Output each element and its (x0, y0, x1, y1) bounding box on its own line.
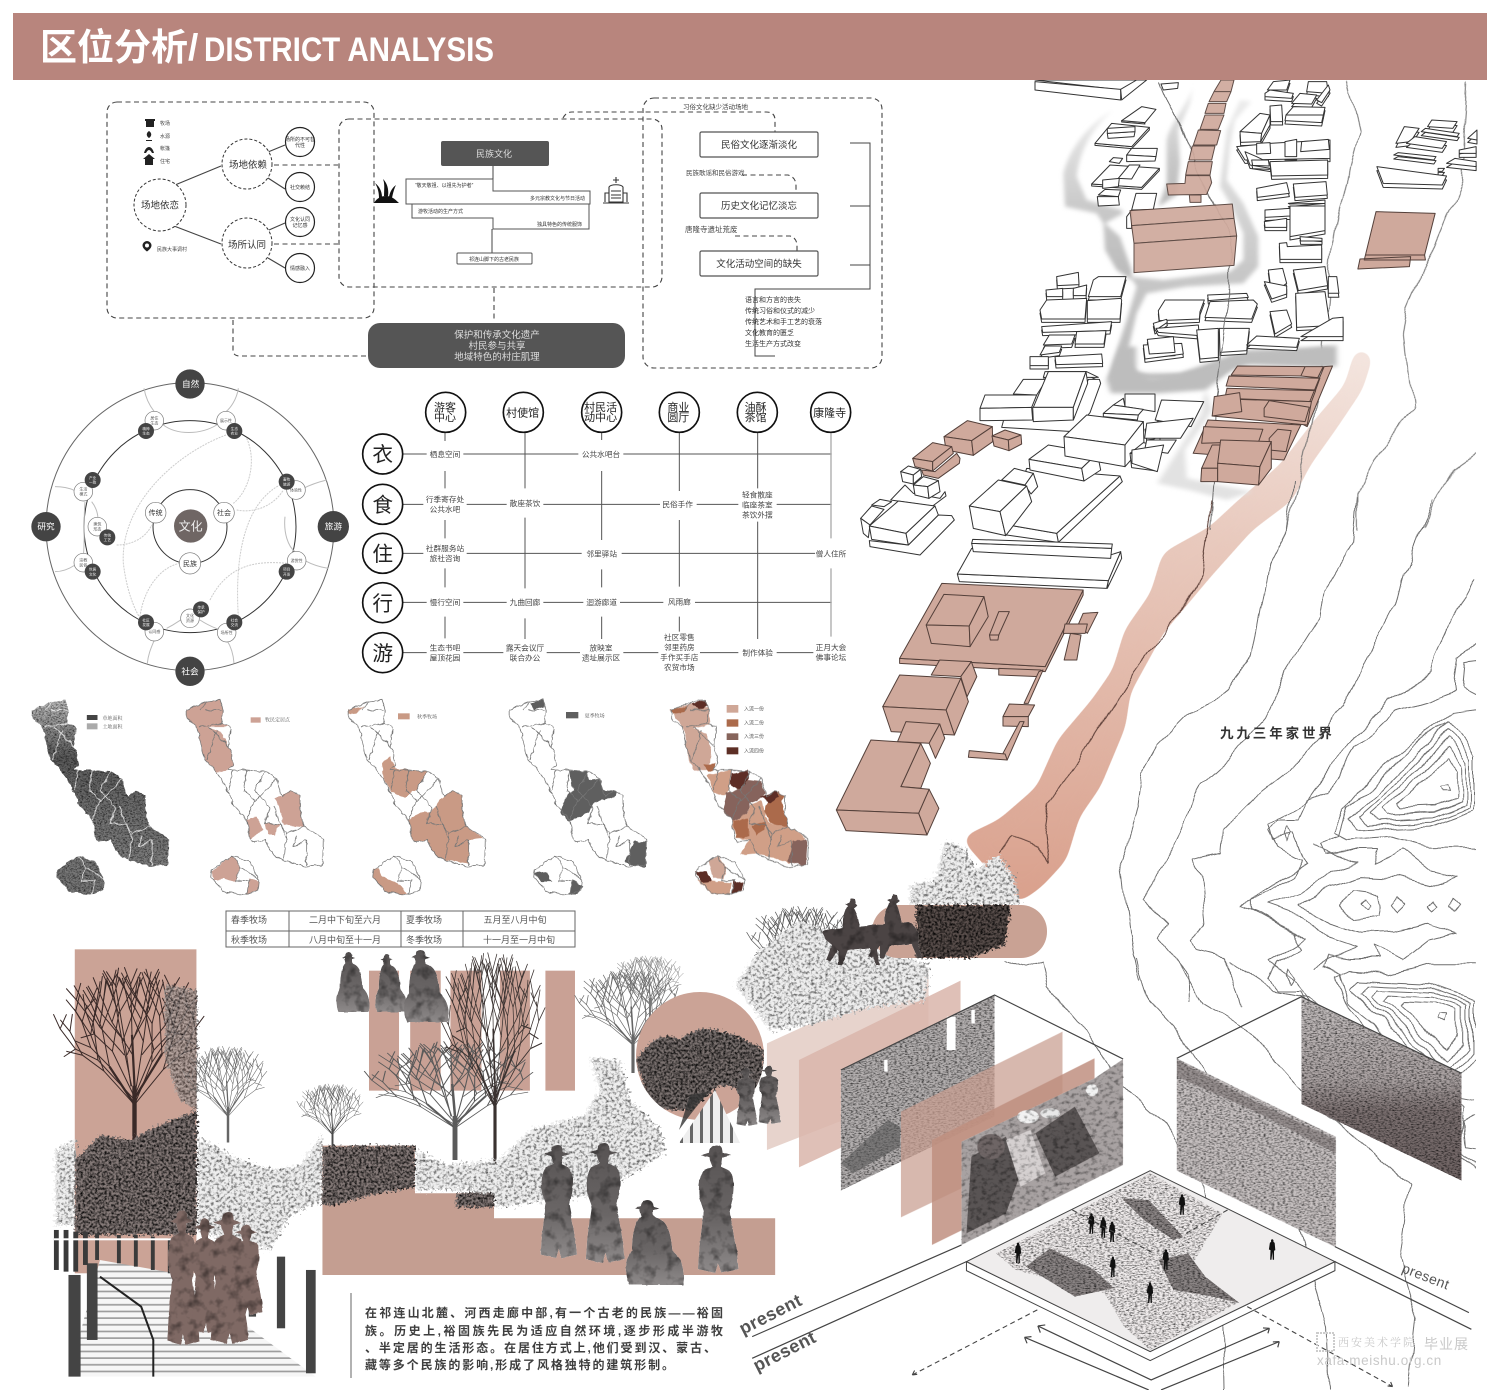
chart: culture orbit diagram: 模式 (79, 490, 87, 496)
panel: place attachment diagram: 场地依恋 (141, 200, 179, 212)
chart: programme matrix: 住 (372, 543, 393, 566)
chart: culture orbit diagram: 发展 (142, 622, 150, 627)
small figures (1015, 1194, 1275, 1303)
chart: culture orbit diagram: 产业 (89, 475, 97, 480)
chart: programme matrix: 屋顶花园 (430, 652, 461, 662)
pink plane B (799, 981, 961, 1167)
chart: programme matrix: 栖息空间 (430, 449, 460, 459)
chart: culture orbit diagram: 场所性 (221, 629, 233, 635)
panel: problems: 历史文化记忆淡忘 (721, 200, 797, 212)
map 1: land texture (32, 699, 169, 894)
callout: conclusion box: 地域特色的村庄肌理 (454, 351, 540, 363)
map 5: composite pasture layers (671, 699, 808, 894)
chart: culture orbit diagram: 农业 (231, 431, 238, 436)
watermark: xafa.meishu.org.cn (1317, 1353, 1442, 1368)
chart: culture orbit diagram: 生态 (142, 431, 150, 436)
town massing: upper white buildings (1030, 80, 1330, 381)
panel: problems: 唐隆寺遗址荒废 (685, 224, 738, 234)
dark box: ethnic culture: 民族文化 (476, 148, 512, 159)
chart: culture orbit diagram: 传统 (149, 508, 163, 517)
table: pasture seasons: 冬季牧场 (406, 934, 442, 945)
chart: programme matrix: 手作买手店 (660, 652, 699, 662)
chart: programme matrix: 公共水吧 (430, 504, 461, 514)
chart: culture orbit diagram: 文化 (89, 571, 97, 576)
chart: programme matrix: 邻里驿站 (586, 549, 617, 559)
foliage: dark shrubs (75, 985, 494, 1235)
chart: culture orbit diagram: 展示性 (220, 417, 232, 423)
panel: ethnic culture flow: “敬天敬祖、以祖先为护者” (415, 182, 474, 189)
chart: culture orbit diagram: 生态 (231, 426, 238, 431)
chart: programme matrix: 游客 (434, 400, 456, 414)
panel: ethnic culture flow (339, 112, 775, 320)
label: nine-three family world: 九九三年家世界 (1220, 725, 1335, 741)
chart: programme matrix: 风雨廊 (668, 596, 691, 606)
header band (13, 13, 1487, 80)
chart: programme matrix: 制作体验 (742, 647, 773, 657)
panel: problems: 语言和方言的丧失 (745, 295, 801, 304)
photo: mountain sky (1301, 997, 1462, 1181)
panel: ethnic culture flow: 多元宗教文化与节日活动 (530, 195, 585, 202)
chart: culture orbit diagram: 旅游 (283, 481, 291, 486)
chart: programme matrix: 正月大会 (816, 642, 847, 652)
panel: place attachment diagram: 代性 (295, 142, 305, 149)
paragraph: site introduction: 藏等多个民族的影响,形成了风格独特的建筑形制。 (365, 1357, 674, 1372)
chart: culture orbit diagram: 社会 (181, 665, 199, 676)
chart: culture orbit diagram: 传统 (104, 532, 111, 537)
chart: programme matrix: 动中心 (584, 411, 617, 424)
chart: culture orbit diagram: 资源 (186, 617, 194, 623)
chart: culture orbit diagram: 文化 (186, 612, 194, 618)
callout: conclusion box: 保护和传承文化遗产 (454, 329, 540, 341)
pink plane A (767, 969, 929, 1150)
panel: problems (643, 98, 882, 368)
chart: culture orbit diagram: 开发 (283, 571, 291, 576)
chart: programme matrix: 露天会议厅 (506, 642, 544, 652)
panel: ethnic culture flow: 独具特色的传统服饰 (537, 221, 582, 228)
dark box: ethnic culture (441, 141, 549, 166)
watermark: 西安美术学院 (1338, 1335, 1416, 1349)
table: pasture seasons: 八月中旬至十一月 (309, 934, 381, 945)
panel: iso photo planes (752, 969, 1471, 1390)
chart: programme matrix: 食 (372, 494, 393, 517)
chart: programme matrix (363, 392, 851, 673)
map 2: settlement points (187, 699, 323, 894)
chart: programme matrix: 迴游廊道 (586, 597, 617, 607)
chart: culture orbit diagram: 民族 (183, 559, 197, 568)
chart: programme matrix: 慢行空间 (430, 597, 460, 607)
panel: place attachment diagram: 文化认同 (290, 216, 310, 223)
chart: culture orbit diagram: 社会 (217, 508, 231, 517)
chart: programme matrix: 民俗手作 (662, 499, 693, 509)
chart: culture orbit diagram: 精神 (142, 426, 150, 431)
panel: place attachment diagram: 场所的不可替 (285, 136, 315, 143)
buildings: west of temple (1092, 83, 1178, 228)
panel: pasture collage background (75, 949, 775, 1275)
table: pasture seasons: 夏季牧场 (406, 914, 442, 925)
chart: culture orbit diagram: 居住 (150, 414, 158, 420)
photo: grazing animals (1177, 1058, 1336, 1247)
town massing: pink heritage buildings (836, 80, 1435, 835)
silhouettes: seated herders (337, 950, 449, 1022)
panel: place attachment diagram: 民族大事调村 (157, 246, 187, 253)
chart: culture orbit diagram: 畜牧 (283, 477, 291, 482)
chart: culture orbit diagram: 传承 (197, 604, 205, 609)
chart: culture orbit diagram: 工艺 (104, 537, 111, 542)
chart: culture orbit diagram: 社会 (231, 617, 238, 622)
table: pasture seasons: 五月至八月中旬 (483, 914, 547, 925)
town massing: lower white buildings (861, 372, 1160, 588)
header band: DISTRICT ANALYSIS (204, 31, 494, 69)
watermark: 毕业展 (1424, 1336, 1469, 1352)
chart: culture orbit diagram: 文化 (179, 518, 203, 533)
map 3: autumn pasture (348, 699, 485, 894)
buildings: east and centre (1030, 83, 1330, 381)
chart: programme matrix: 放映室 (590, 642, 613, 652)
icon: temple (603, 177, 629, 203)
panel: place attachment diagram: 记忆感 (292, 222, 308, 229)
chart: programme matrix: 商业 (667, 400, 689, 414)
chart: programme matrix: 僧人住所 (816, 549, 847, 559)
silhouettes: standing villagers (541, 1143, 738, 1285)
panel: place attachment diagram: 场地依赖 (229, 159, 267, 171)
map 5: composite pasture layers: 入流二份 (744, 719, 764, 726)
paragraph: site introduction: 族。历史上,裕固族先民为适应自然环境,逐步形成半游牧 (365, 1323, 723, 1338)
chart: programme matrix: 联合办公 (510, 652, 541, 662)
chart: programme matrix: 社区零售 (664, 632, 695, 642)
chart: culture orbit diagram: 旅游 (325, 521, 342, 532)
chart: programme matrix: 茶饮外摆 (742, 509, 773, 519)
chart: culture orbit diagram: 保护 (197, 609, 205, 614)
chart: programme matrix: 九曲回廊 (510, 597, 541, 607)
map 5: composite pasture layers: 入流四份 (744, 747, 764, 754)
chart: culture orbit diagram: 认同感 (148, 628, 160, 634)
chart: programme matrix: 衣 (372, 444, 393, 467)
panel: problems: 文化活动空间的缺失 (716, 258, 802, 270)
chart: programme matrix: 轻食散座 (742, 489, 773, 499)
chart: programme matrix: 社群服务站 (426, 543, 464, 553)
chart: programme matrix: 中心 (434, 411, 456, 424)
chart: programme matrix: 村民活 (584, 400, 617, 414)
panel: problems: 民俗文化逐渐淡化 (721, 139, 797, 151)
base map (966, 1171, 1335, 1361)
panel: place attachment diagram (107, 102, 374, 356)
chart: culture orbit diagram: 生活 (79, 485, 87, 491)
map 2: settlement points: 牧民定居点 (265, 717, 291, 724)
chart: programme matrix: 公共水吧台 (582, 449, 620, 459)
chart: culture orbit diagram: 自然 (182, 378, 200, 389)
boardwalk (54, 1230, 316, 1377)
panel: place attachment diagram: 场所认同 (228, 239, 266, 251)
circle vignette (636, 992, 781, 1143)
labels: present: present (750, 1327, 819, 1376)
map 1: land texture: 草地面积 (102, 715, 123, 722)
table: pasture seasons: 秋季牧场 (231, 934, 267, 945)
chart: programme matrix: 农贸市场 (664, 662, 695, 672)
chart: culture orbit diagram: 宗教 (79, 556, 87, 562)
chart: culture orbit diagram: 民俗 (79, 561, 87, 567)
chart: programme matrix: 邻里药房 (664, 642, 695, 652)
silhouettes: horse riders (822, 894, 922, 965)
table: pasture seasons (226, 911, 575, 947)
chart: culture orbit diagram (31, 369, 349, 686)
callout: conclusion box (368, 323, 625, 368)
panel: problems: 文化教育的匮乏 (745, 328, 794, 337)
pill shape with shrub (872, 905, 1047, 958)
map 5: composite pasture layers: 入流三份 (744, 733, 764, 740)
buildings: riverside cluster (1132, 400, 1204, 472)
paragraph: site introduction: 在祁连山北麓、河西走廊中部,有一个古老的民族——裕固 (365, 1305, 723, 1320)
map 3: autumn pasture: 秋季牧场 (417, 713, 437, 720)
table: pasture seasons: 春季牧场 (231, 914, 267, 925)
chart: culture orbit diagram: 游赏性 (291, 557, 303, 563)
chart: programme matrix: 临座茶室 (742, 499, 773, 509)
chart: culture orbit diagram: 交流 (231, 622, 238, 627)
chart: programme matrix: 旅社咨询 (430, 553, 461, 563)
building: northern plate (1035, 80, 1147, 100)
pink plane C (901, 1032, 1063, 1217)
map 5: composite pasture layers: 入流一份 (744, 706, 764, 713)
chart: culture orbit diagram: 体验性 (290, 486, 302, 492)
chart: programme matrix: 遗址展示区 (582, 652, 620, 662)
panel: ethnic culture flow: 祁连山脚下的古老民族 (469, 256, 519, 263)
panel: place attachment diagram: 情感融入 (290, 265, 310, 272)
callout: conclusion box: 村民参与共享 (468, 340, 526, 352)
labels: present: present (1400, 1260, 1452, 1293)
panel: problems: 民族歌谣和民俗游戏 (686, 168, 745, 177)
table: pasture seasons: 二月中下旬至六月 (309, 914, 381, 925)
thin route line (999, 80, 1231, 863)
panel: place attachment diagram: 住宅 (160, 158, 170, 165)
panel: place attachment diagram: 水源 (160, 133, 170, 140)
labels: present (736, 1260, 1452, 1376)
chart: programme matrix: 村使馆 (506, 405, 539, 419)
chart: programme matrix: 行季寄存处 (426, 494, 464, 504)
chart: programme matrix: 茶馆 (745, 410, 767, 424)
chart: programme matrix: 行 (372, 592, 393, 615)
photo: workers (962, 1059, 1123, 1245)
table: pasture seasons: 十一月至一月中旬 (483, 934, 555, 945)
chart: programme matrix: 游 (372, 642, 393, 665)
chart: culture orbit diagram: 形态 (93, 525, 101, 531)
map 1: land texture: 土地面积 (102, 723, 123, 730)
chart: culture orbit diagram: 一致 (89, 480, 97, 485)
panel: ethnic culture flow: 游牧活动的生产方式 (418, 208, 463, 215)
chart: programme matrix: 康隆寺 (813, 405, 846, 419)
panel: problems: 生活生产方式改变 (745, 339, 801, 348)
chart: culture orbit diagram: 社区 (142, 617, 150, 622)
guide lines (752, 1245, 1471, 1390)
paragraph: site introduction (351, 1293, 723, 1378)
chart: culture orbit diagram: 世居 (89, 567, 97, 572)
grey roads (1063, 87, 1337, 500)
map 4: summer pasture (510, 698, 647, 894)
header band: 区位分析/ (40, 27, 198, 68)
panel: problems: 传统艺术和手工艺的衰落 (745, 317, 822, 326)
illustration: bare trees (47, 901, 858, 1164)
chart: programme matrix: 生态书吧 (430, 642, 461, 652)
photo: excavation (841, 995, 995, 1191)
chart: programme matrix: 散座茶饮 (510, 498, 541, 508)
contour map (1006, 80, 1477, 1390)
panel: place attachment diagram: 帐篷 (160, 145, 170, 152)
foliage: light shrubs (55, 840, 1020, 1250)
panel: place attachment diagram: 社交赖结 (290, 184, 310, 191)
chart: culture orbit diagram: 研究 (37, 521, 55, 532)
paragraph: site introduction: 、半定居的生活形态。在居住方式上,他们受到汉、蒙古、 (365, 1340, 716, 1355)
watermark (1317, 1333, 1469, 1368)
chart: programme matrix: 圆厅 (667, 411, 689, 424)
panel: problems: 习俗文化缺少活动场地 (683, 102, 748, 111)
panel: place attachment diagram: 牧场 (160, 120, 170, 127)
frame lines (841, 995, 1462, 1073)
chart: culture orbit diagram: 生态 (150, 419, 158, 425)
silhouettes: brown figure group (167, 1210, 263, 1345)
chart: culture orbit diagram: 建筑 (93, 520, 101, 526)
labels: present: present (736, 1290, 805, 1339)
chart: culture orbit diagram: 项目 (283, 567, 291, 572)
icon: grass (374, 179, 399, 203)
town massing: far-right white buildings (1301, 120, 1477, 341)
chart: programme matrix: 佛事论坛 (816, 652, 847, 662)
panel: problems: 传统习俗和仪式的减少 (745, 306, 815, 315)
chart: programme matrix: 油酥 (745, 400, 767, 414)
map 4: summer pasture: 夏季牧场 (585, 712, 605, 719)
pink plane D (932, 1058, 1095, 1245)
river band (961, 348, 1373, 903)
